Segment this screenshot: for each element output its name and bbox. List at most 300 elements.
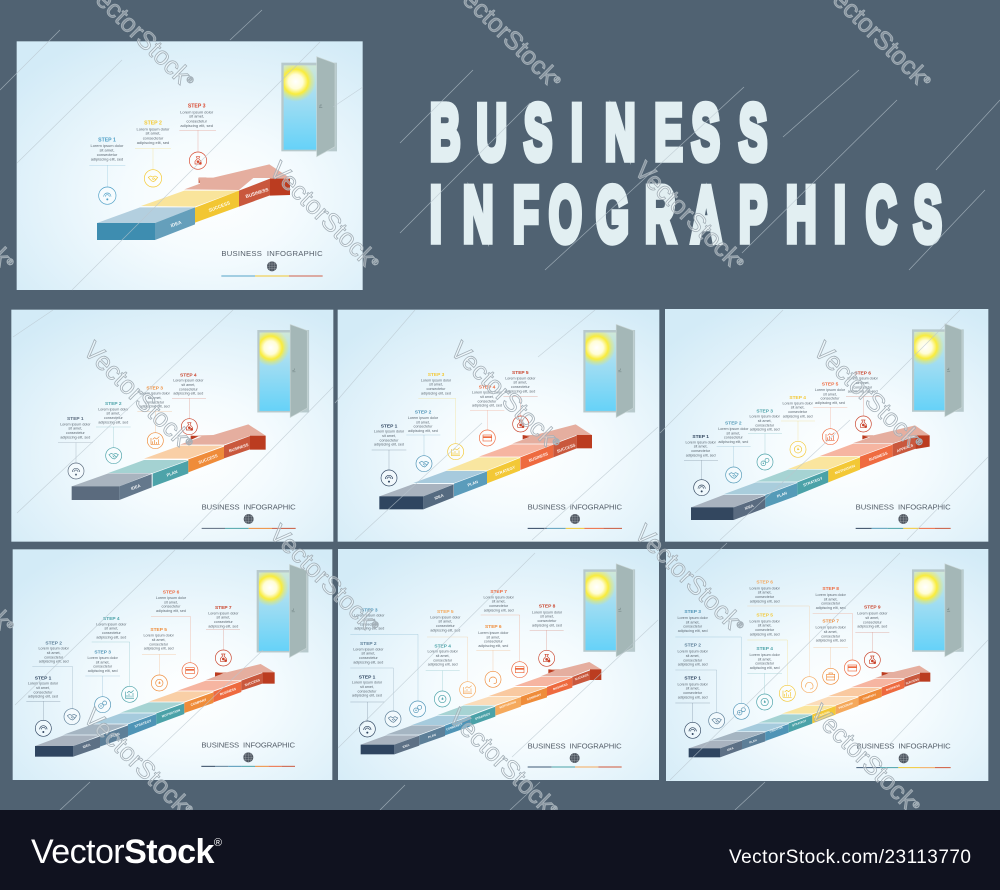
step 1: STEP 1: [67, 416, 84, 422]
step 1: consectetur: [34, 690, 53, 694]
step 9: adipiscing elit, sed: [857, 625, 887, 629]
step 3: [85, 650, 120, 713]
step 4: Lorem ipsum dolor: [96, 622, 127, 626]
step 2: STEP 2: [360, 641, 377, 647]
block: IDEA: [361, 735, 419, 754]
step 1: Lorem ipsum dolor: [60, 422, 91, 426]
step 4: adipiscing elit, sed: [173, 392, 203, 396]
step 3: consectetur: [427, 387, 446, 391]
step 5: Lorem ipsum dolor: [815, 388, 846, 392]
step 3: sit amet,: [96, 660, 110, 664]
step 8: consectetur: [538, 619, 557, 623]
title: BUSINESS INFOGRAPHICS: INFOGRAPHICS: [430, 171, 942, 258]
step 6: STEP 6: [854, 370, 871, 376]
step 4: STEP 4: [789, 395, 806, 401]
watermark: VectorStock repeats: ®: [734, 619, 746, 631]
step 7: STEP 7: [490, 589, 507, 595]
step 5: Lorem ipsum dolor: [144, 634, 175, 638]
watermark: VectorStock repeats: VectorStock: [629, 156, 745, 272]
step 3: Lorem ipsum dolor: [88, 656, 119, 660]
step 2: consectetur: [104, 416, 124, 420]
step 6: Lorem ipsum dolor: [848, 377, 879, 381]
step 4: adipiscing elit, sed: [472, 404, 502, 408]
step 3: consectetur: [755, 423, 775, 427]
step 1: adipiscing elit, sed: [678, 695, 708, 699]
step 4: [747, 646, 782, 710]
step 4: consectetur: [478, 399, 497, 403]
step 9: STEP 9: [864, 605, 881, 611]
step 7: consectetur: [821, 634, 841, 638]
step 9: sit amet,: [865, 616, 879, 620]
block: MOTIVATION: MOTIVATION: [834, 464, 856, 475]
step 4: [781, 395, 815, 457]
step 5: sit amet,: [823, 392, 837, 396]
footer heading: [221, 249, 323, 276]
panel: five steps: [338, 310, 659, 542]
footer heading: BUSINESS INFOGRAPHIC: [202, 502, 296, 511]
step 3: sit amet,: [758, 419, 772, 423]
block: PROGRAM: PROGRAM: [838, 701, 854, 710]
step 3: adipiscing elit, sed: [750, 428, 780, 432]
step 4: Lorem ipsum dolor: [173, 379, 204, 383]
block: PLAN: PLAN: [166, 469, 178, 478]
panel: six steps: [665, 309, 988, 542]
block: SUCCESS: [141, 191, 239, 223]
step 7: [481, 589, 528, 678]
step 8: STEP 8: [539, 604, 556, 610]
block: STRATEGY: [756, 470, 828, 495]
block: COMPANY: [489, 687, 547, 706]
watermark: VectorStock repeats: ®: [551, 74, 563, 86]
step 1: sit amet,: [382, 434, 396, 438]
block: PLAN: PLAN: [467, 479, 479, 488]
arrow block: APPEALS: [852, 425, 930, 457]
step 4: adipiscing elit, sed: [428, 663, 458, 667]
step 2: sit amet,: [361, 652, 375, 656]
step 3: consectetur: [186, 118, 208, 123]
step 8: [530, 604, 564, 666]
step 3: Lorem ipsum dolor: [180, 109, 214, 114]
step 4: sit amet,: [758, 657, 772, 661]
step 1: consectetur: [97, 152, 118, 157]
step 9: Lorem ipsum dolor: [857, 612, 888, 616]
step 5: [813, 382, 847, 445]
step 1: [26, 675, 60, 736]
block: IDEA: [72, 473, 152, 500]
block: STRATEGY: [759, 714, 812, 732]
step 4: Lorem ipsum dolor: [428, 650, 459, 654]
door with sun: [907, 324, 964, 417]
step 3: Lorem ipsum dolor: [354, 614, 385, 618]
step 4: STEP 4: [180, 372, 197, 378]
step 5: sit amet,: [758, 624, 772, 628]
door with sun: [907, 564, 964, 657]
step 1: adipiscing elit, sed: [91, 157, 123, 162]
step 3: adipiscing elit, sed: [678, 629, 708, 633]
step 1: Lorem ipsum dolor: [352, 681, 383, 685]
step 4: [172, 372, 206, 435]
step 5: adipiscing elit, sed: [144, 647, 174, 651]
step 5: adipiscing elit, sed: [750, 632, 780, 636]
step 1: consectetur: [358, 689, 377, 693]
door with sun: [276, 57, 337, 157]
block: PLAN: [108, 460, 188, 487]
step 4: adipiscing elit, sed: [750, 666, 780, 670]
step 2: [96, 401, 131, 464]
step 2: adipiscing elit, sed: [353, 660, 383, 664]
step 2: consectetur: [414, 425, 433, 429]
step 5: Lorem ipsum dolor: [750, 619, 781, 623]
block: COMPANY: COMPANY: [190, 697, 208, 707]
watermark: VectorStock repeats: VectorStock: [78, 703, 194, 819]
footer heading: [201, 741, 295, 766]
watermark: VectorStock repeats: ®: [734, 256, 746, 268]
step 2: Lorem ipsum dolor: [678, 650, 709, 654]
step 4: consectetur: [102, 631, 122, 635]
step 2: sit amet,: [47, 651, 61, 655]
step 2: STEP 2: [144, 121, 162, 127]
block: IDEA: IDEA: [170, 219, 183, 228]
block: COMPANY: COMPANY: [862, 692, 877, 701]
block: STRATEGY: STRATEGY: [792, 718, 807, 727]
block: BUSINESS: BUSINESS: [868, 451, 889, 462]
step 7: consectetur: [489, 604, 509, 608]
step 3: STEP 3: [684, 609, 701, 615]
step 3: [418, 372, 464, 460]
step 9: [855, 605, 889, 668]
watermark: VectorStock repeats: ®: [369, 256, 381, 268]
block: BUSINESS: BUSINESS: [219, 687, 237, 696]
arrow block: SUCCESS: [512, 424, 592, 457]
step 4: sit amet,: [104, 627, 118, 631]
bottom bar: [0, 810, 1000, 890]
step 3: sit amet,: [189, 114, 204, 119]
step 1: Lorem ipsum dolor: [374, 430, 405, 434]
arrow block: SUCCESS: [875, 666, 930, 687]
arrow block: SUCCESS: SUCCESS: [556, 442, 576, 454]
step 3: adipiscing elit, sed: [180, 123, 213, 128]
panel: three steps: [17, 41, 363, 290]
arrow block: SUCCESS: SUCCESS: [244, 678, 261, 687]
step 2: sit amet,: [686, 654, 700, 658]
step 3: [350, 607, 426, 717]
step 3: sit amet,: [686, 620, 700, 624]
step 1: sit amet,: [36, 686, 50, 690]
block: STRATEGY: STRATEGY: [803, 476, 824, 488]
step 6: STEP 6: [163, 590, 180, 596]
step 5: STEP 5: [756, 612, 773, 618]
step 8: adipiscing elit, sed: [532, 623, 562, 627]
step 3: [179, 104, 216, 169]
block: BUSINESS: BUSINESS: [552, 682, 568, 691]
block: STRATEGY: STRATEGY: [494, 464, 516, 477]
block: MOTIVATION: [463, 697, 521, 716]
watermark: VectorStock repeats: ®: [183, 803, 195, 815]
step 2: adipiscing elit, sed: [718, 440, 748, 444]
step 4: Lorem ipsum dolor: [472, 391, 503, 395]
step 1: consectetur: [66, 431, 86, 435]
step 3: [675, 609, 749, 719]
step 6: sit amet,: [164, 600, 178, 604]
watermark: VectorStock repeats: VectorStock: [808, 336, 924, 452]
block: PLAN: [712, 732, 765, 749]
block: COMPANY: COMPANY: [526, 693, 542, 701]
step 6: consectetur: [162, 605, 181, 609]
block: IDEA: IDEA: [130, 483, 141, 491]
step 5: adipiscing elit, sed: [815, 401, 845, 405]
step 3: [137, 385, 172, 449]
step 5: consectetur: [436, 624, 456, 628]
block: IDEA: IDEA: [402, 743, 411, 749]
block: IDEA: [379, 484, 454, 509]
step 2: STEP 2: [105, 401, 122, 407]
block: MOTIVATION: [788, 457, 860, 482]
step 7: consectetur: [214, 620, 234, 624]
step 7: adipiscing elit, sed: [484, 608, 514, 612]
step 8: Lorem ipsum dolor: [532, 610, 563, 614]
step 7: sit amet,: [492, 600, 506, 604]
step 6: Lorem ipsum dolor: [478, 631, 509, 635]
step 2: consectetur: [724, 436, 744, 440]
step 3: sit amet,: [362, 618, 376, 622]
footer heading: [528, 741, 622, 767]
step 6: [476, 624, 510, 687]
title: BUSINESS INFOGRAPHICS: BUSINESS: [430, 89, 767, 176]
block: BUSINESS: [852, 679, 904, 696]
step 8: Lorem ipsum dolor: [816, 593, 847, 597]
step 7: Lorem ipsum dolor: [484, 595, 515, 599]
arrow block: SUCCESS: [540, 662, 601, 686]
door with sun: [251, 564, 308, 657]
watermark: VectorStock repeats: ®: [548, 803, 560, 815]
step 4: STEP 4: [756, 646, 773, 652]
step 4: STEP 4: [479, 384, 496, 390]
block: COMPANY: [149, 691, 213, 713]
step 4: consectetur: [755, 662, 775, 666]
step 2: STEP 2: [45, 640, 62, 646]
step 6: consectetur: [484, 640, 504, 644]
block: IDEA: [691, 495, 765, 520]
step 1: Lorem ipsum dolor: [28, 682, 59, 686]
step 7: Lorem ipsum dolor: [208, 611, 239, 615]
watermark: VectorStock repeats: ®: [369, 619, 381, 631]
image id: VectorStock.com/23113770: [729, 847, 971, 868]
block: PLAN: PLAN: [749, 738, 757, 745]
step 7: Lorem ipsum dolor: [816, 626, 847, 630]
footer heading: [856, 741, 951, 768]
watermark: VectorStock repeats: ®: [913, 436, 925, 448]
step 5: consectetur: [821, 397, 840, 401]
watermark: VectorStock repeats: ®: [921, 74, 933, 86]
step 1: [350, 674, 384, 737]
watermark: VectorStock repeats: VectorStock: [78, 336, 194, 452]
arrow block: BUSINESS: [184, 164, 290, 207]
step 6: Lorem ipsum dolor: [750, 586, 781, 590]
step 2: Lorem ipsum dolor: [39, 647, 70, 651]
block: PLAN: PLAN: [776, 491, 788, 499]
step 6: Lorem ipsum dolor: [156, 596, 187, 600]
step 3: STEP 3: [756, 408, 773, 414]
block: PLAN: [723, 482, 797, 507]
step 1: Lorem ipsum dolor: [90, 143, 124, 148]
step 3: sit amet,: [429, 383, 443, 387]
step 4: adipiscing elit, sed: [783, 414, 813, 418]
block: BUSINESS: BUSINESS: [886, 683, 901, 692]
logo: VectorStock: VectorStock: [31, 833, 214, 871]
block: MOTIVATION: [121, 702, 184, 724]
step 1: Lorem ipsum dolor: [686, 440, 717, 444]
block: STRATEGY: STRATEGY: [134, 718, 153, 729]
step 3: STEP 3: [188, 104, 206, 110]
step 4: Lorem ipsum dolor: [750, 653, 781, 657]
step 5: adipiscing elit, sed: [505, 389, 535, 393]
arrow block: APPEALS: APPEALS: [896, 443, 914, 453]
step 6: adipiscing elit, sed: [478, 644, 508, 648]
step 1: [675, 675, 710, 738]
panel: four steps: [11, 310, 333, 542]
step 2: consectetur: [359, 656, 379, 660]
step 4: STEP 4: [103, 616, 120, 622]
watermark: VectorStock repeats: VectorStock: [629, 519, 745, 635]
step 1: consectetur: [683, 691, 703, 695]
step 1: consectetur: [380, 438, 399, 442]
step 2: STEP 2: [415, 410, 432, 416]
watermark: VectorStock repeats: ®: [4, 619, 16, 631]
step 4: consectetur: [433, 658, 453, 662]
step 6: sit amet,: [486, 635, 500, 639]
block: COMMUNITY: [412, 716, 470, 735]
arrow block: BUSINESS: BUSINESS: [245, 187, 269, 199]
step 2: consectetur: [44, 655, 64, 659]
step 3: Lorem ipsum dolor: [750, 415, 781, 419]
block: PLAN: PLAN: [110, 732, 121, 739]
step 7: [813, 619, 848, 684]
block: MOTIVATION: [782, 706, 836, 723]
block: BUSINESS: BUSINESS: [528, 451, 549, 463]
step 6: consectetur: [755, 595, 775, 599]
watermark: VectorStock repeats: ®: [4, 256, 16, 268]
step 2: [406, 410, 440, 472]
block: STRATEGY: [92, 713, 156, 736]
block: MOTIVATION: MOTIVATION: [499, 700, 516, 710]
block: CREATIVE: CREATIVE: [769, 725, 784, 734]
step 8: STEP 8: [822, 586, 839, 592]
block: IDEA: IDEA: [744, 504, 755, 511]
step 1: adipiscing elit, sed: [686, 453, 716, 457]
step 7: adipiscing elit, sed: [208, 624, 238, 628]
step 2: consectetur: [143, 135, 164, 140]
step 7: STEP 7: [822, 619, 839, 625]
step 3: STEP 3: [428, 372, 445, 378]
block: PLAN: [64, 724, 128, 747]
step 2: [135, 121, 171, 187]
step 7: adipiscing elit, sed: [816, 639, 846, 643]
step 6: consectetur: [853, 385, 873, 389]
step 1: [89, 137, 125, 204]
step 2: [675, 643, 725, 729]
arrow block: BUSINESS: BUSINESS: [228, 442, 249, 453]
step 1: adipiscing elit, sed: [60, 435, 90, 439]
step 5: [503, 370, 538, 432]
step 3: [748, 408, 782, 470]
step 3: Lorem ipsum dolor: [678, 616, 709, 620]
arrow block: SUCCESS: [206, 664, 275, 691]
watermark: VectorStock repeats: VectorStock: [805, 699, 921, 815]
block: COMMUNITY: COMMUNITY: [445, 722, 463, 732]
step 4: sit amet,: [791, 406, 805, 410]
step 5: sit amet,: [513, 381, 527, 385]
step 1: adipiscing elit, sed: [352, 694, 382, 698]
block: STRATEGY: [438, 706, 495, 726]
step 4: Lorem ipsum dolor: [783, 401, 814, 405]
footer heading: BUSINESS INFOGRAPHIC: [528, 741, 622, 750]
step 2: [350, 641, 401, 727]
block: PLAN: [413, 471, 487, 497]
step 1: sit amet,: [68, 427, 82, 431]
step 3: consectetur: [93, 665, 113, 669]
block: IDEA: IDEA: [82, 743, 92, 749]
watermark: VectorStock repeats: ®: [910, 799, 922, 811]
step 1: sit amet,: [99, 147, 115, 152]
step 7: [206, 605, 240, 666]
step 8: [813, 586, 860, 676]
footer heading: BUSINESS INFOGRAPHIC: [856, 502, 951, 511]
panel: nine steps: [666, 549, 988, 781]
step 1: STEP 1: [381, 423, 398, 429]
step 4: adipiscing elit, sed: [96, 635, 126, 639]
step 3: consectetur: [360, 622, 380, 626]
step 5: STEP 5: [150, 627, 167, 633]
step 2: consectetur: [683, 658, 703, 662]
step 1: [684, 434, 718, 496]
watermark: VectorStock repeats: VectorStock: [443, 703, 559, 819]
step 1: [58, 416, 93, 479]
step 6: sit amet,: [758, 591, 772, 595]
step 5: sit amet,: [152, 638, 166, 642]
watermark: VectorStock repeats: VectorStock: [264, 519, 380, 635]
step 5: [142, 627, 176, 691]
step 5: STEP 5: [822, 382, 839, 388]
step 9: consectetur: [863, 620, 883, 624]
step 1: STEP 1: [359, 674, 376, 680]
block: PROGRAM: [805, 697, 858, 714]
step 7: STEP 7: [215, 605, 232, 611]
block: BUSINESS: [515, 677, 572, 696]
block: CREATIVE: [735, 723, 789, 741]
block: IDEA: IDEA: [726, 746, 734, 752]
block: STRATEGY: [446, 457, 520, 483]
step 5: sit amet,: [438, 620, 452, 624]
step 3: adipiscing elit, sed: [140, 405, 170, 409]
step 2: Lorem ipsum dolor: [718, 427, 749, 431]
step 2: adipiscing elit, sed: [678, 663, 708, 667]
step 2: Lorem ipsum dolor: [408, 416, 439, 420]
watermark: VectorStock repeats: VectorStock: [264, 156, 380, 272]
footer heading: BUSINESS INFOGRAPHIC: [528, 502, 622, 511]
step 3: Lorem ipsum dolor: [140, 392, 171, 396]
block: PLAN: [386, 725, 445, 745]
step 1: adipiscing elit, sed: [374, 443, 404, 447]
step 8: consectetur: [821, 602, 841, 606]
step 2: sit amet,: [726, 431, 740, 435]
step 2: Lorem ipsum dolor: [98, 407, 129, 411]
step 1: STEP 1: [35, 675, 52, 681]
step 2: sit amet,: [145, 131, 161, 136]
step 1: sit amet,: [360, 685, 374, 689]
footer heading: BUSINESS INFOGRAPHIC: [201, 741, 295, 750]
step 5: STEP 5: [437, 609, 454, 615]
step 5: consectetur: [511, 385, 531, 389]
